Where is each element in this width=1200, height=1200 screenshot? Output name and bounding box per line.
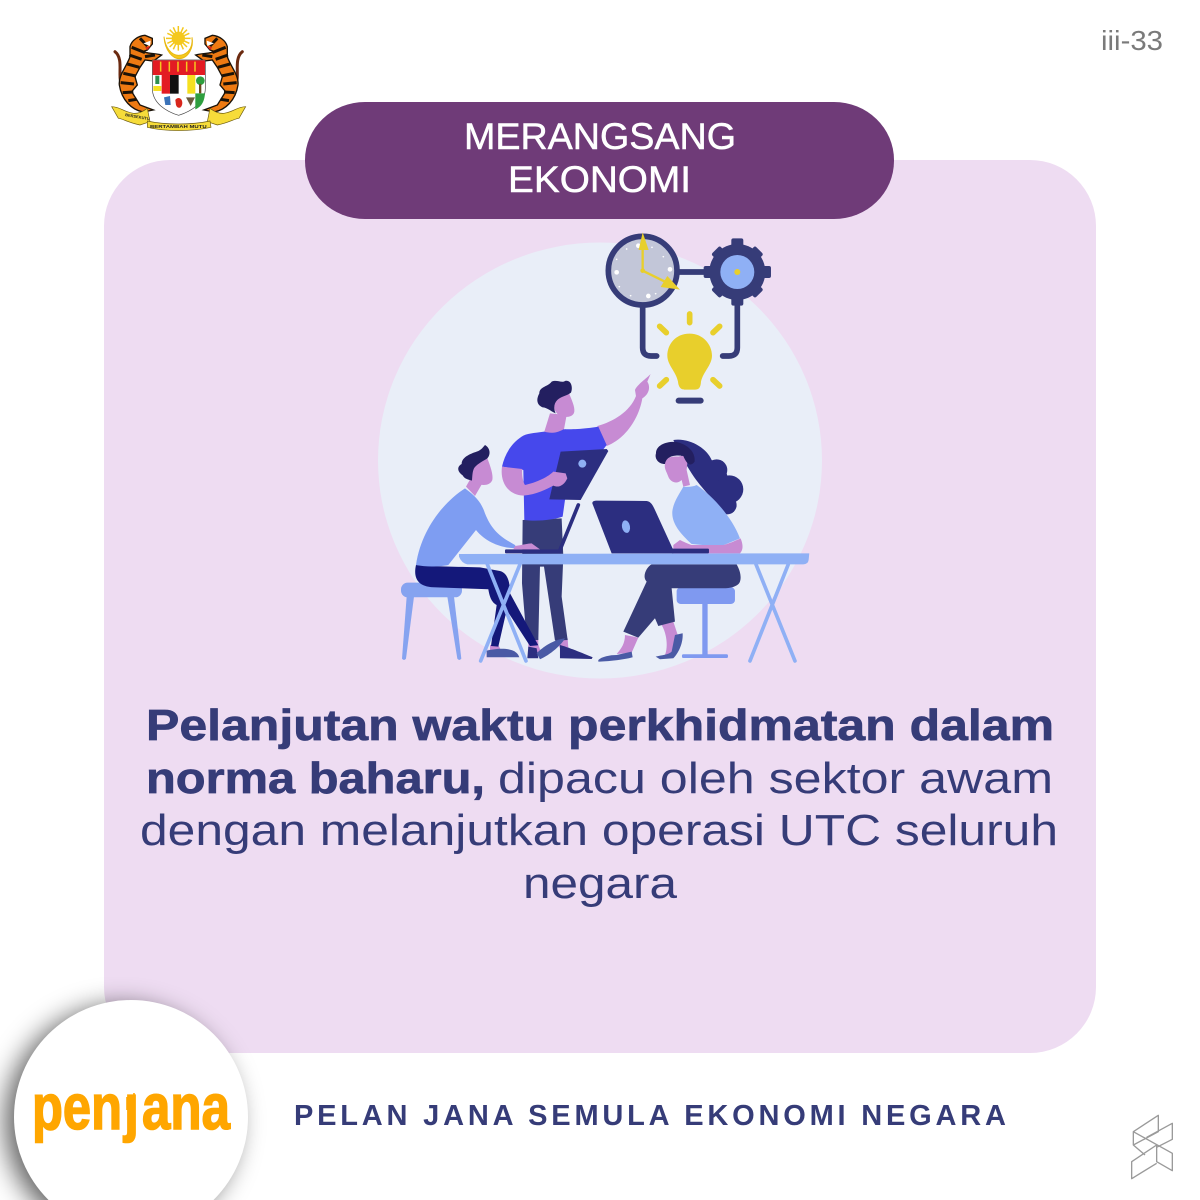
illustration: three people working at a table bbox=[401, 374, 809, 662]
penjana wordmark: pen bbox=[32, 1071, 122, 1143]
icon: gear bbox=[704, 238, 771, 306]
motto ribbon: BERTAMBAH MUTU bbox=[150, 124, 207, 129]
penjana wordmark: ana bbox=[142, 1071, 230, 1143]
body text: norma baharu, bbox=[146, 754, 485, 803]
left tiger bbox=[115, 35, 162, 112]
icon: light bulb bbox=[660, 314, 720, 401]
panel: main lilac card bbox=[104, 160, 1096, 1053]
icon group: clock, gear and light bulb bbox=[608, 232, 771, 401]
motto ribbon bbox=[112, 107, 246, 131]
left stool bbox=[401, 583, 462, 660]
body text: dipacu oleh sektor awam bbox=[498, 754, 1053, 803]
body text: dengan melanjutkan operasi UTC seluruh bbox=[140, 806, 1058, 855]
seated man on the left bbox=[415, 445, 565, 659]
body text: Pelanjutan waktu perkhidmatan dalam bbox=[146, 701, 1054, 750]
logo badge: penjana bbox=[5, 1000, 248, 1200]
body text: negara bbox=[523, 859, 678, 908]
large laptop bbox=[592, 501, 709, 553]
penjana wordmark bbox=[32, 1071, 230, 1143]
small laptop between the men bbox=[505, 505, 578, 553]
woman with curly hair bbox=[598, 440, 743, 662]
page number: iii-33 bbox=[1101, 25, 1163, 56]
right tiger bbox=[196, 35, 242, 112]
right stool bbox=[677, 587, 735, 658]
shield bbox=[152, 60, 205, 115]
heading pill bbox=[305, 102, 894, 219]
illustration background circle bbox=[378, 242, 822, 678]
heading text: MERANGSANG bbox=[464, 115, 736, 157]
standing man pointing up bbox=[502, 374, 651, 659]
footer tagline: PELAN JANA SEMULA EKONOMI NEGARA bbox=[294, 1100, 1006, 1132]
icon: Malaysian coat of arms bbox=[112, 26, 246, 131]
table bbox=[459, 553, 809, 661]
icon: publisher mark bbox=[1132, 1115, 1172, 1179]
icon: clock bbox=[608, 232, 680, 305]
sun and crescent bbox=[164, 26, 192, 59]
connecting pipes bbox=[643, 272, 737, 356]
motto ribbon: BERSEKUTU bbox=[125, 112, 150, 121]
penjana wordmark: j bbox=[123, 1071, 139, 1143]
heading text: EKONOMI bbox=[508, 158, 691, 200]
